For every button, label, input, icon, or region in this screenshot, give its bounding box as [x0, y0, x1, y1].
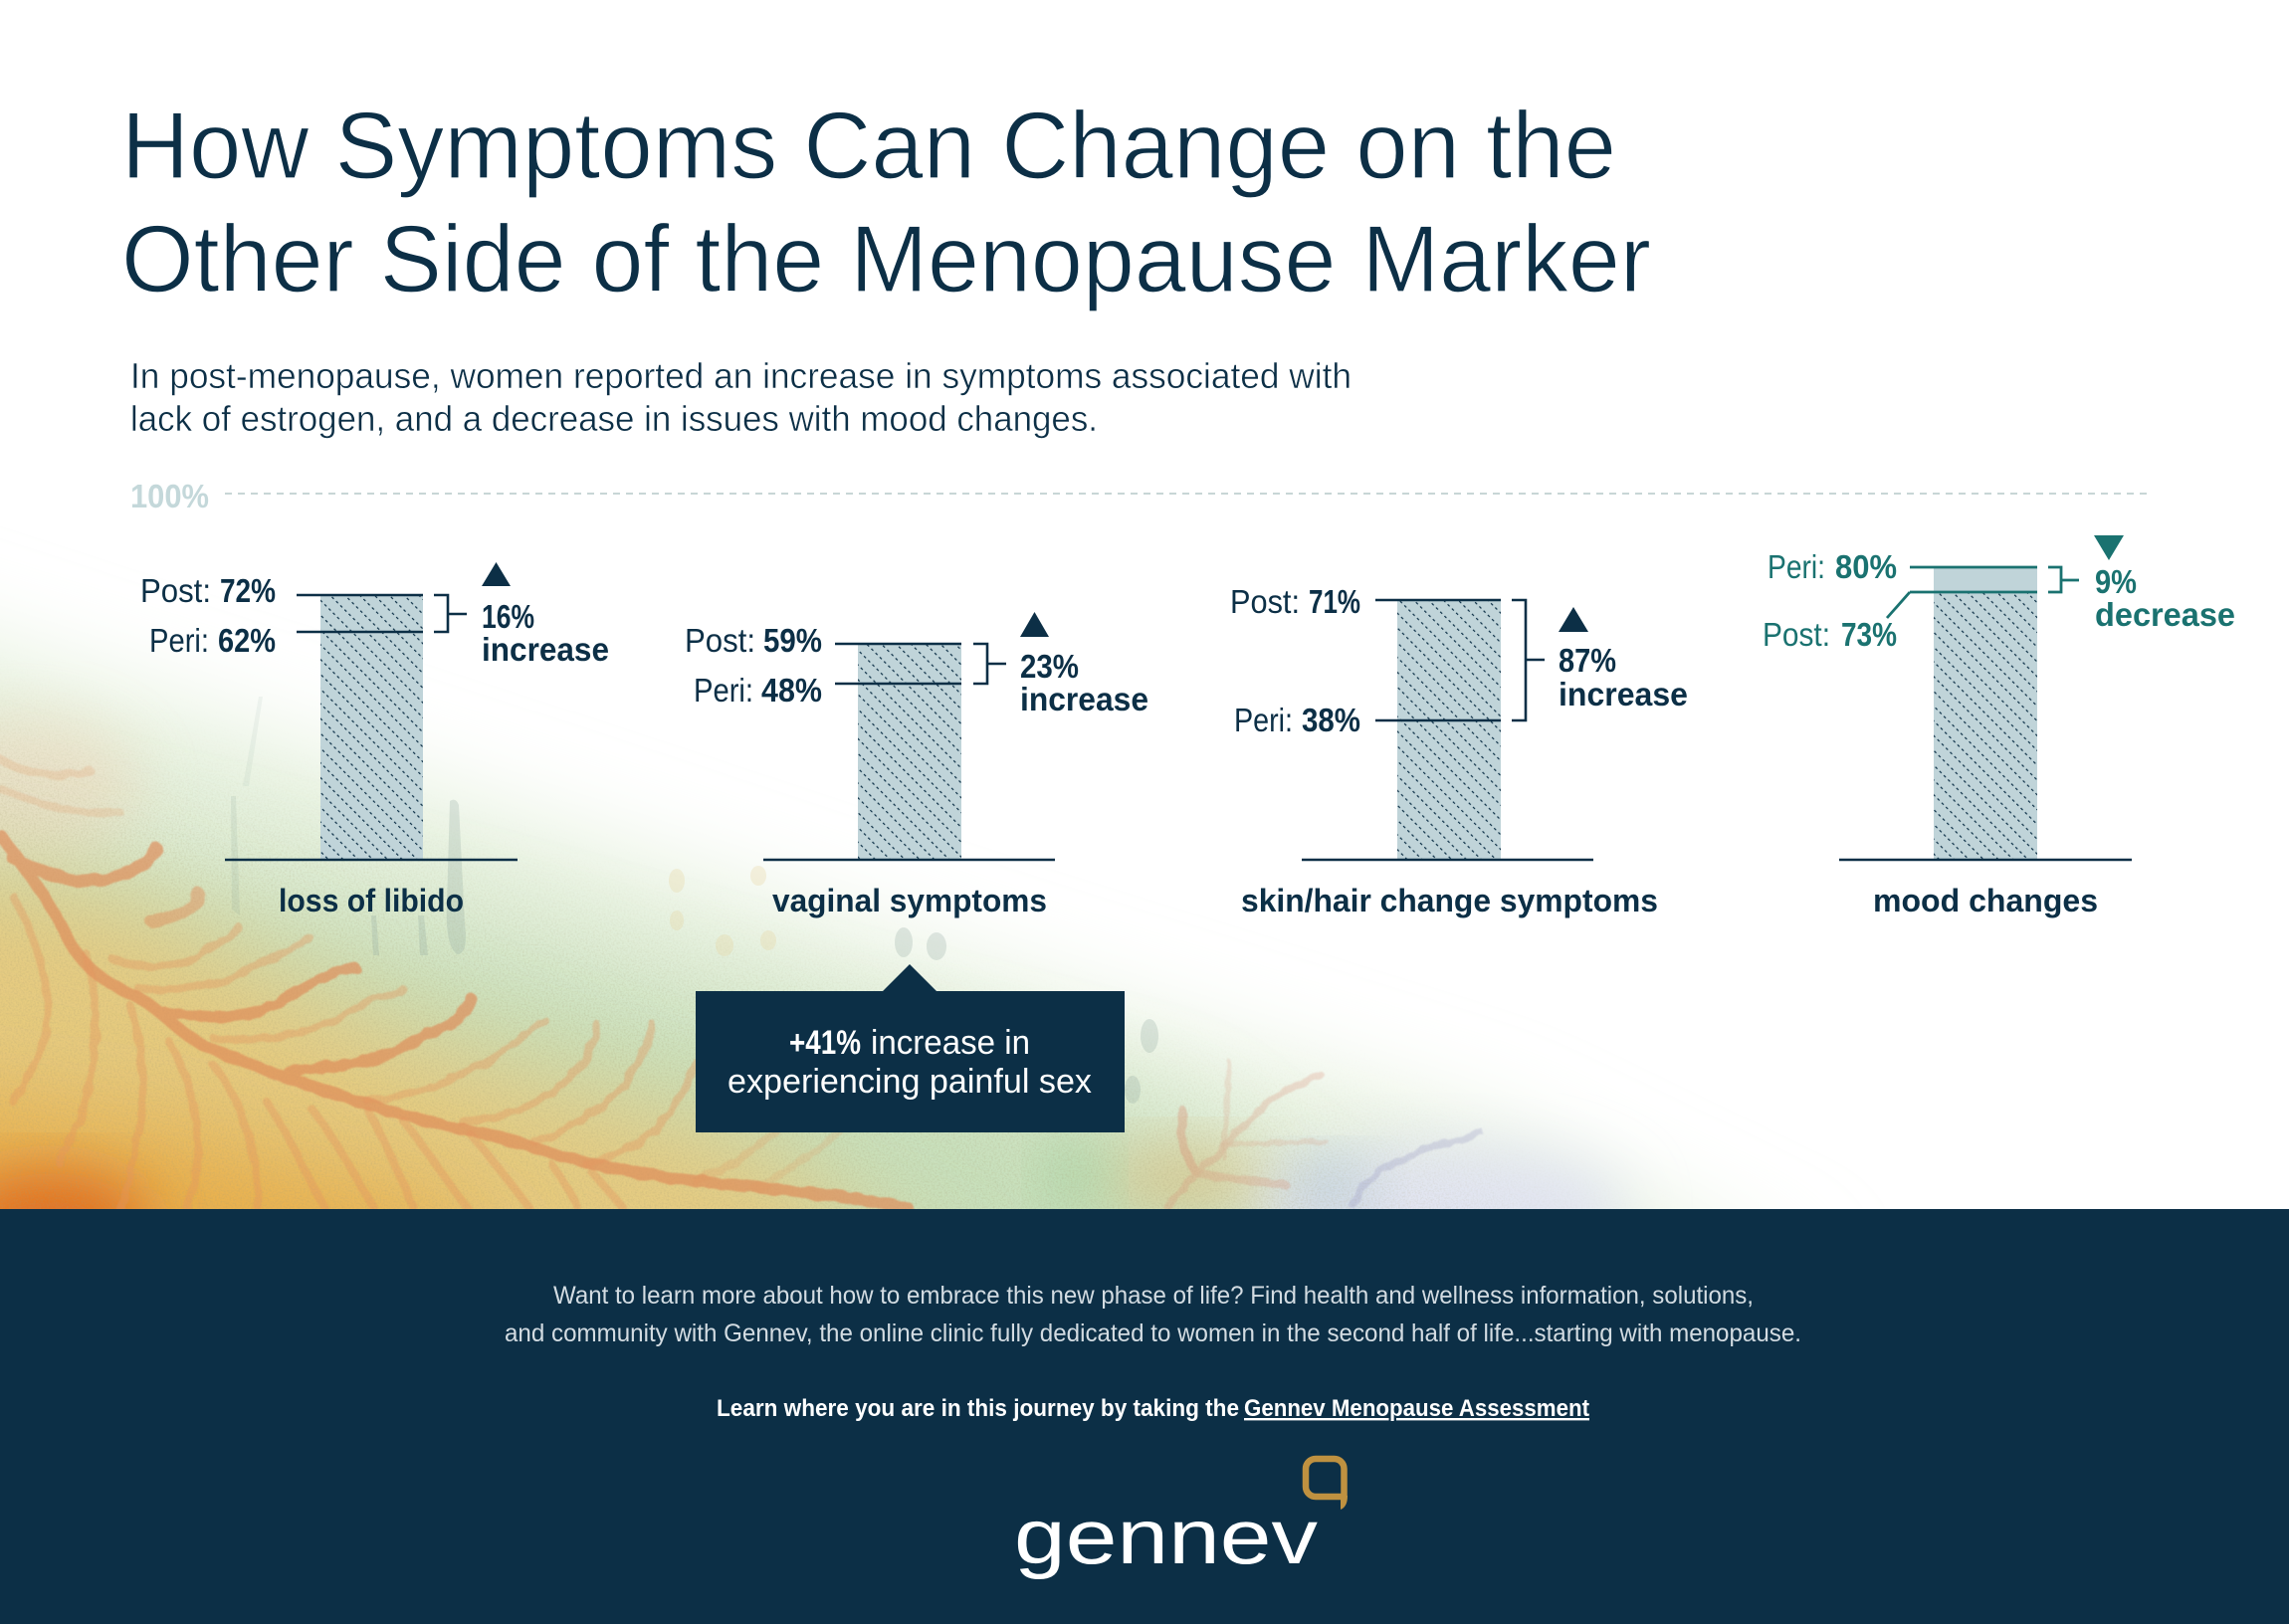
callout box with pointer [696, 964, 1125, 1132]
background watercolor wash with fern [0, 619, 1714, 1209]
call to action: Learn where you are in this journey by taking the [717, 1395, 1239, 1422]
post label: 71% [1309, 583, 1360, 620]
footer text [505, 1282, 1801, 1347]
callout text: +41% [789, 1024, 861, 1062]
change callout: 16% [482, 598, 534, 635]
peri label: 62% [218, 622, 276, 659]
change callout [1559, 642, 1688, 712]
category label: mood changes [1873, 883, 2098, 918]
peri label: Peri: [1768, 548, 1825, 585]
subtitle: lack of estrogen, and a decrease in issues with mood changes. [130, 398, 1098, 439]
watercolor paper grain [0, 716, 1545, 1209]
change callout: increase [1020, 681, 1148, 717]
category label: loss of libido [279, 883, 464, 918]
post label [685, 622, 822, 659]
callout text: experiencing painful sex [728, 1063, 1092, 1101]
change callout: increase [482, 631, 609, 668]
bracket [1512, 600, 1545, 720]
post label [1230, 583, 1360, 620]
subtitle: In post-menopause, women reported an increase in symptoms associated with [130, 355, 1352, 396]
logo [1014, 1459, 1348, 1580]
fern main stems [2, 837, 908, 1208]
logo wordmark: gennev [1014, 1493, 1318, 1580]
icon: down triangle [2094, 535, 2124, 560]
bracket [973, 644, 1006, 684]
solid bar top [1934, 567, 2037, 592]
grey drips and droplets [231, 697, 1158, 1104]
change callout: 23% [1020, 648, 1079, 685]
bar chart: mood changes [1763, 535, 2235, 918]
post and peri markers [835, 644, 961, 684]
callout text: increase in [871, 1024, 1030, 1062]
lavender arc [1351, 1131, 1483, 1207]
callout text [728, 1024, 1092, 1101]
post label [140, 572, 276, 609]
bar [858, 644, 961, 860]
subtitle [130, 355, 1352, 439]
post label [1763, 616, 1897, 653]
fern fine branches [0, 759, 1326, 1207]
peri label [1234, 702, 1360, 738]
bar chart: skin/hair change symptoms [1230, 583, 1688, 918]
call to action: Gennev Menopause Assessment [1244, 1395, 1589, 1422]
bar [1934, 592, 2037, 860]
change callout [482, 598, 609, 668]
change callout [1020, 648, 1148, 717]
footer background [0, 1209, 2289, 1624]
peri label: 38% [1302, 702, 1360, 738]
title: Other Side of the Menopause Marker [121, 206, 1651, 312]
change callout [2095, 563, 2235, 633]
100% reference line: 100% [130, 478, 209, 514]
title: How Symptoms Can Change on the [121, 93, 1616, 199]
category label: skin/hair change symptoms [1241, 883, 1658, 918]
post label: 73% [1841, 616, 1897, 653]
baseline [1302, 859, 1593, 861]
footer panel [0, 1209, 2289, 1624]
post label: Post: [1763, 616, 1830, 653]
bar [320, 595, 423, 860]
peri label: Peri: [149, 622, 209, 659]
footer text: and community with Gennev, the online clinic fully dedicated to women in the second half of life...starting with menopause. [505, 1320, 1801, 1347]
change callout: 87% [1559, 642, 1616, 679]
post label: 59% [763, 622, 822, 659]
bar chart: vaginal symptoms [685, 612, 1148, 918]
post label: 72% [220, 572, 276, 609]
post label: Post: [140, 572, 211, 609]
footer text: Want to learn more about how to embrace this new phase of life? Find health and wellness information, solutions, [553, 1282, 1754, 1310]
icon: up triangle [1559, 607, 1588, 632]
post and peri markers [297, 595, 423, 632]
bar [1397, 600, 1501, 860]
peri label: Peri: [694, 672, 753, 709]
callout: painful sex [696, 964, 1125, 1132]
title [121, 93, 1651, 312]
change callout: 9% [2095, 563, 2137, 600]
icon: up triangle [482, 562, 511, 586]
bracket [434, 595, 467, 632]
baseline [763, 859, 1055, 861]
change callout: increase [1559, 676, 1688, 712]
category label: vaginal symptoms [772, 883, 1047, 918]
bar chart: loss of libido [140, 562, 609, 918]
peri and post markers [1887, 567, 2037, 618]
icon: up triangle [1020, 612, 1049, 637]
peri label: Peri: [1234, 702, 1293, 738]
peri label: 48% [761, 672, 822, 709]
peri label: 80% [1835, 548, 1897, 585]
change callout: decrease [2095, 596, 2235, 633]
call to action [717, 1395, 1589, 1422]
baseline [1839, 859, 2132, 861]
post and peri markers [1375, 600, 1501, 720]
peri label [694, 672, 822, 709]
post label: Post: [1230, 583, 1300, 620]
post label: Post: [685, 622, 755, 659]
icon: gold speech bubble [1306, 1459, 1348, 1510]
peri label [149, 622, 276, 659]
bracket [2048, 567, 2079, 592]
baseline [225, 859, 518, 861]
peri label [1768, 548, 1897, 585]
